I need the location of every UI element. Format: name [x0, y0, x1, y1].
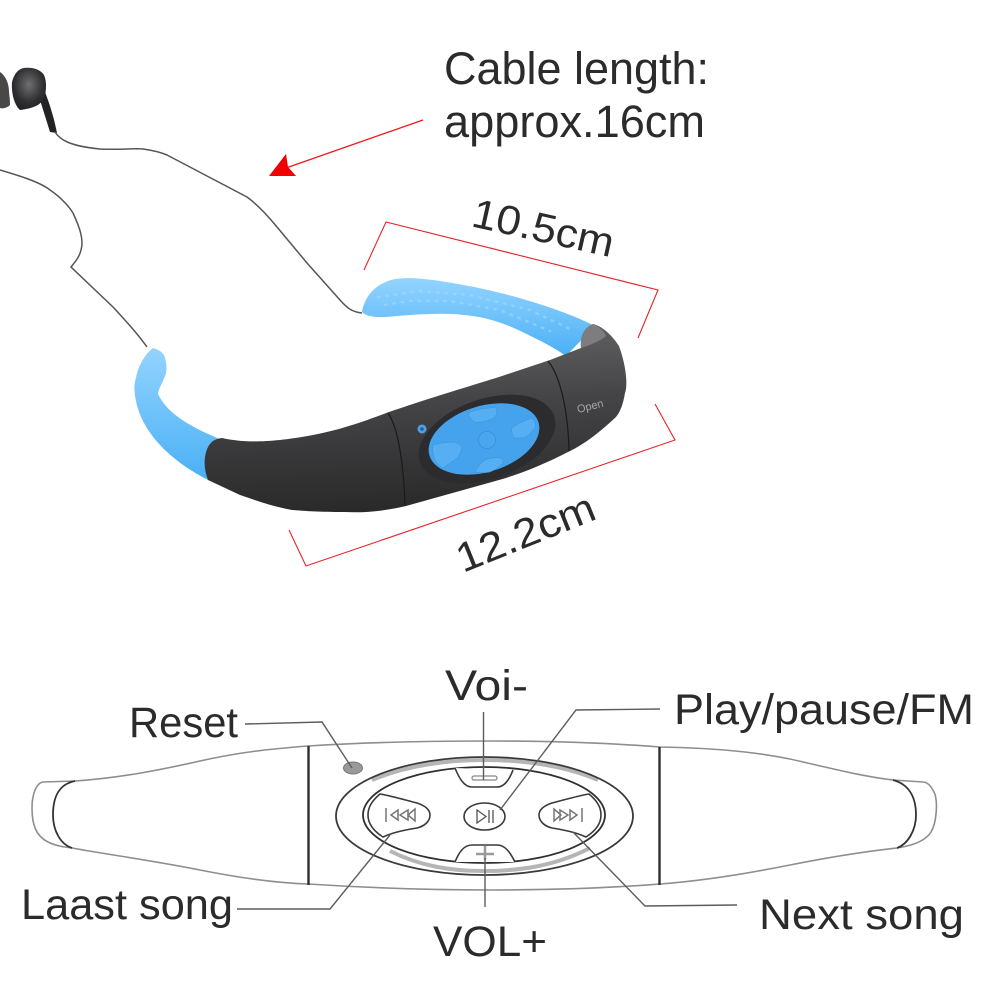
oval bottom shading [390, 848, 590, 871]
control plate [407, 378, 567, 500]
inner button plate [363, 767, 605, 863]
body seam right [548, 361, 569, 451]
leader: voi minus [482, 712, 484, 780]
blue button pad [420, 391, 548, 487]
label: VOL+: VOL+ [433, 918, 547, 966]
leader: reset [245, 722, 352, 768]
left blue arm [134, 348, 222, 480]
inner arm socket [581, 324, 606, 348]
section dividers [307, 746, 310, 885]
dimension text: 12.2cm: 12.2cm [449, 484, 602, 581]
text: cable length: approx.16cm [444, 96, 705, 147]
text: cable length: Cable length: [444, 43, 709, 94]
dimension bracket: 10.5cm [364, 222, 658, 338]
dimension bracket: 12.2cm [289, 404, 675, 566]
text: cable length [444, 43, 709, 147]
oval top shading [372, 760, 598, 780]
volume minus button [455, 768, 513, 787]
leader: vol plus [484, 858, 486, 907]
leader: play pause [500, 709, 660, 810]
Open label: Open [576, 398, 605, 416]
label: Play/pause/FM: Play/pause/FM [674, 686, 974, 734]
label: Reset: Reset [129, 699, 238, 747]
line diagram: headset controls [32, 709, 936, 909]
annotation: cable length arrow [269, 120, 423, 176]
leader: last song [237, 835, 390, 909]
last song button [368, 794, 430, 837]
label: Voi-: Voi- [445, 662, 528, 710]
reset indicator [418, 424, 426, 434]
earbud [0, 68, 57, 133]
outer body outline [32, 741, 936, 890]
next song button [539, 794, 601, 837]
cable to left arm [0, 170, 147, 347]
product photo: headset [0, 68, 626, 512]
volume plus button [455, 845, 515, 862]
outer oval [336, 757, 633, 875]
cable to right arm [55, 132, 362, 313]
leader: next song [573, 832, 737, 906]
end cap arcs [53, 781, 75, 848]
label: Laast song: Laast song [21, 881, 233, 929]
black body [205, 324, 626, 512]
dimension text: 10.5cm: 10.5cm [468, 190, 619, 266]
label: Next song: Next song [759, 891, 964, 939]
play pause button [464, 803, 505, 830]
body seam left [388, 413, 405, 506]
right blue arm [362, 278, 595, 356]
reset pinhole [344, 762, 362, 774]
